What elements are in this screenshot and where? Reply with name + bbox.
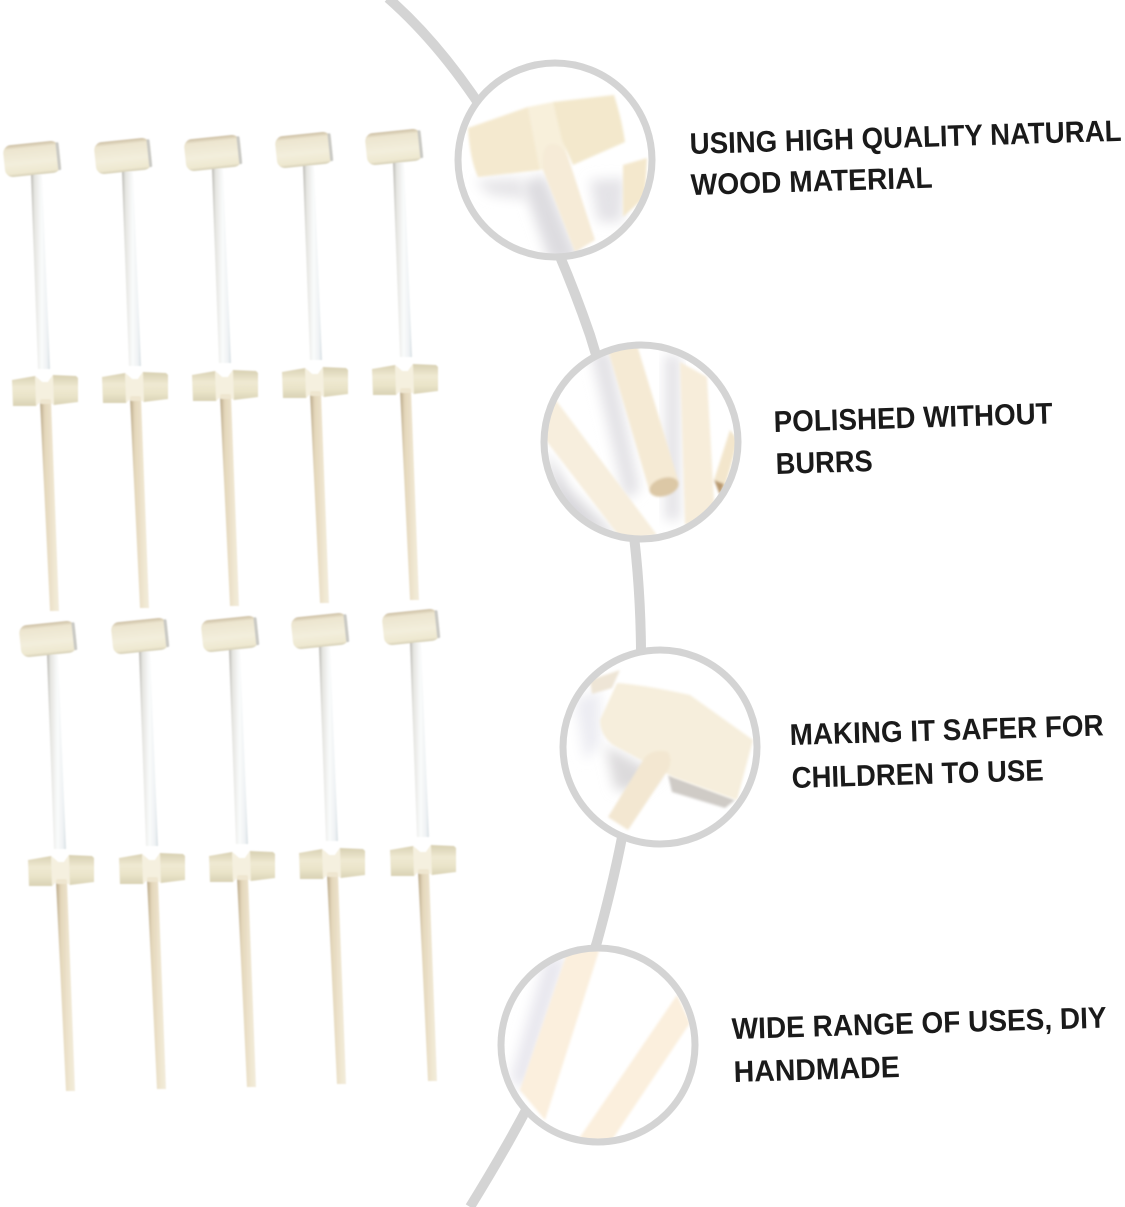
row 4 of mallets [28, 845, 456, 1091]
mallet [282, 367, 348, 603]
detail circle: mallet head close-up [458, 63, 652, 262]
mallet [28, 855, 94, 1091]
mallet [12, 375, 78, 611]
mallet [93, 137, 153, 366]
mallet [192, 370, 258, 606]
mallet [299, 848, 365, 1084]
mallet [274, 131, 334, 360]
detail circle: mallet head and handle close-up [563, 650, 757, 844]
mallet [110, 617, 170, 846]
caption: wide range of uses [731, 1002, 1107, 1089]
mallet [290, 612, 350, 841]
mallet [381, 608, 441, 837]
row 1 of mallets [2, 128, 424, 369]
mallet [372, 364, 438, 600]
caption: safer for children: MAKING IT SAFER FOR [789, 709, 1104, 752]
mallet [2, 140, 62, 369]
caption: wide range of uses: WIDE RANGE OF USES, DIY [731, 1002, 1107, 1046]
mallet [209, 851, 275, 1087]
mallet [364, 128, 424, 357]
mallet [18, 620, 78, 849]
detail circle: polished sticks close-up [538, 345, 738, 540]
caption: polished without burrs [773, 397, 1053, 481]
curved grey connector line [388, 0, 641, 1207]
caption: polished without burrs: BURRS [775, 445, 873, 481]
detail circle: handles close-up [501, 948, 695, 1142]
mallet [102, 372, 168, 608]
caption: natural wood material: WOOD MATERIAL [690, 162, 933, 202]
mallet [183, 134, 243, 363]
mallet [390, 845, 456, 1081]
caption: natural wood material [689, 115, 1122, 202]
mallet [200, 615, 260, 844]
caption: safer for children: CHILDREN TO USE [791, 754, 1044, 795]
caption: polished without burrs: POLISHED WITHOUT [773, 397, 1053, 439]
caption: safer for children [789, 709, 1104, 795]
mallet [119, 853, 185, 1089]
caption: wide range of uses: HANDMADE [733, 1051, 900, 1089]
row 3 of mallets [18, 608, 441, 849]
row 2 of mallets [12, 364, 438, 611]
